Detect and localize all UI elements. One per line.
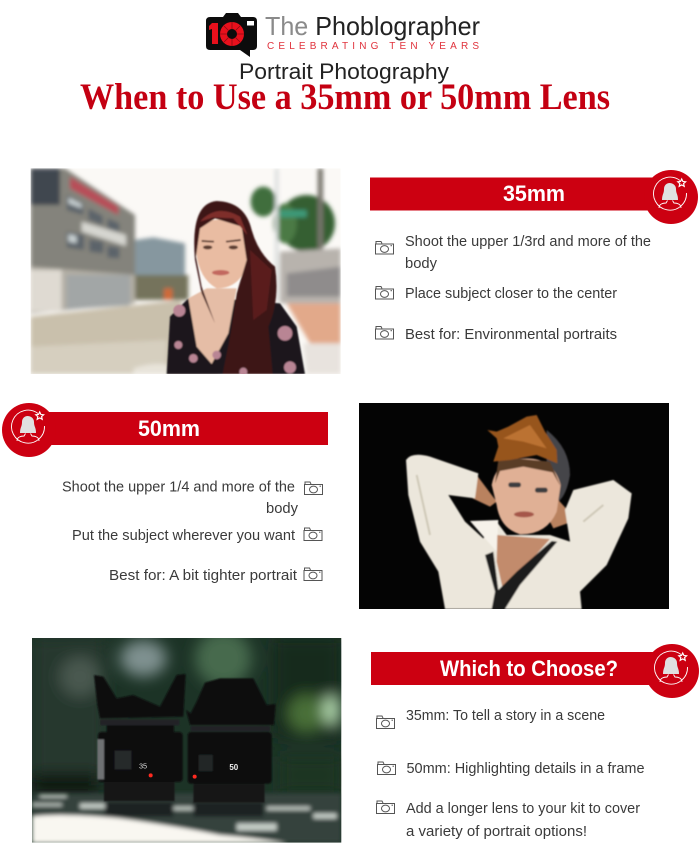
heading bar: 50mm: 50mm bbox=[138, 416, 200, 441]
heading bar: 35mm: 35mm bbox=[503, 181, 565, 206]
text: longer lens advice: Add a longer lens to your kit to cover bbox=[406, 800, 640, 817]
text: upper quarter: body bbox=[266, 500, 298, 517]
text: subject placement: Place subject closer to the center bbox=[405, 285, 617, 302]
photo: two lenses on table: 50 bbox=[229, 763, 239, 772]
icon: camera bullet bbox=[376, 801, 394, 814]
text: best for: Best for: Environmental portraits bbox=[405, 326, 617, 343]
icon: camera bullet bbox=[378, 762, 396, 774]
photo: woman on street, 35mm portrait bbox=[31, 168, 341, 376]
photo: two lenses on table: 35 bbox=[139, 762, 147, 771]
icon: camera bullet bbox=[376, 326, 394, 339]
text: upper third: Shoot the upper 1/3rd and more of the bbox=[405, 233, 651, 250]
heading bar: 50mm bbox=[45, 412, 328, 445]
photo: woman with arms behind head, 50mm portrait bbox=[359, 403, 669, 609]
icon: portrait badge bbox=[2, 403, 56, 457]
header logo bbox=[206, 11, 480, 57]
heading bar: which to choose: Which to Choose? bbox=[440, 656, 618, 681]
photo: two lenses on table bbox=[32, 630, 341, 843]
icon: portrait badge bbox=[645, 644, 699, 698]
logo wordmark: The Phoblographer bbox=[265, 11, 480, 41]
logo tagline: CELEBRATING TEN YEARS bbox=[267, 41, 479, 52]
text: upper third: body bbox=[405, 255, 437, 272]
icon: camera bullet bbox=[376, 242, 394, 254]
icon: camera bullet bbox=[376, 286, 394, 299]
text: 50mm advice: 50mm: Highlighting details in a frame bbox=[406, 760, 644, 777]
title: When to Use a 35mm or 50mm Lens bbox=[80, 77, 610, 118]
icon: camera bullet bbox=[304, 568, 322, 580]
text: 35mm advice: 35mm: To tell a story in a scene bbox=[406, 707, 605, 724]
text: subject placement: Put the subject wherever you want bbox=[72, 527, 296, 544]
text: best for: Best for: A bit tighter portrait bbox=[109, 567, 298, 584]
icon: camera bullet bbox=[304, 528, 322, 540]
section: 35mm bbox=[370, 170, 698, 343]
icon: portrait badge bbox=[644, 170, 698, 224]
icon: camera bullet bbox=[304, 482, 322, 494]
icon: camera logo bbox=[206, 13, 257, 57]
subtitle: Portrait Photography bbox=[239, 59, 449, 84]
text: longer lens advice: a variety of portrait options! bbox=[406, 823, 587, 840]
icon: camera bullet bbox=[376, 716, 394, 728]
heading bar: which to choose bbox=[371, 652, 656, 685]
section: which to choose bbox=[371, 644, 699, 840]
text: upper quarter: Shoot the upper 1/4 and more of the bbox=[62, 478, 295, 496]
section: 50mm bbox=[2, 403, 328, 584]
heading bar: 35mm bbox=[370, 178, 655, 210]
